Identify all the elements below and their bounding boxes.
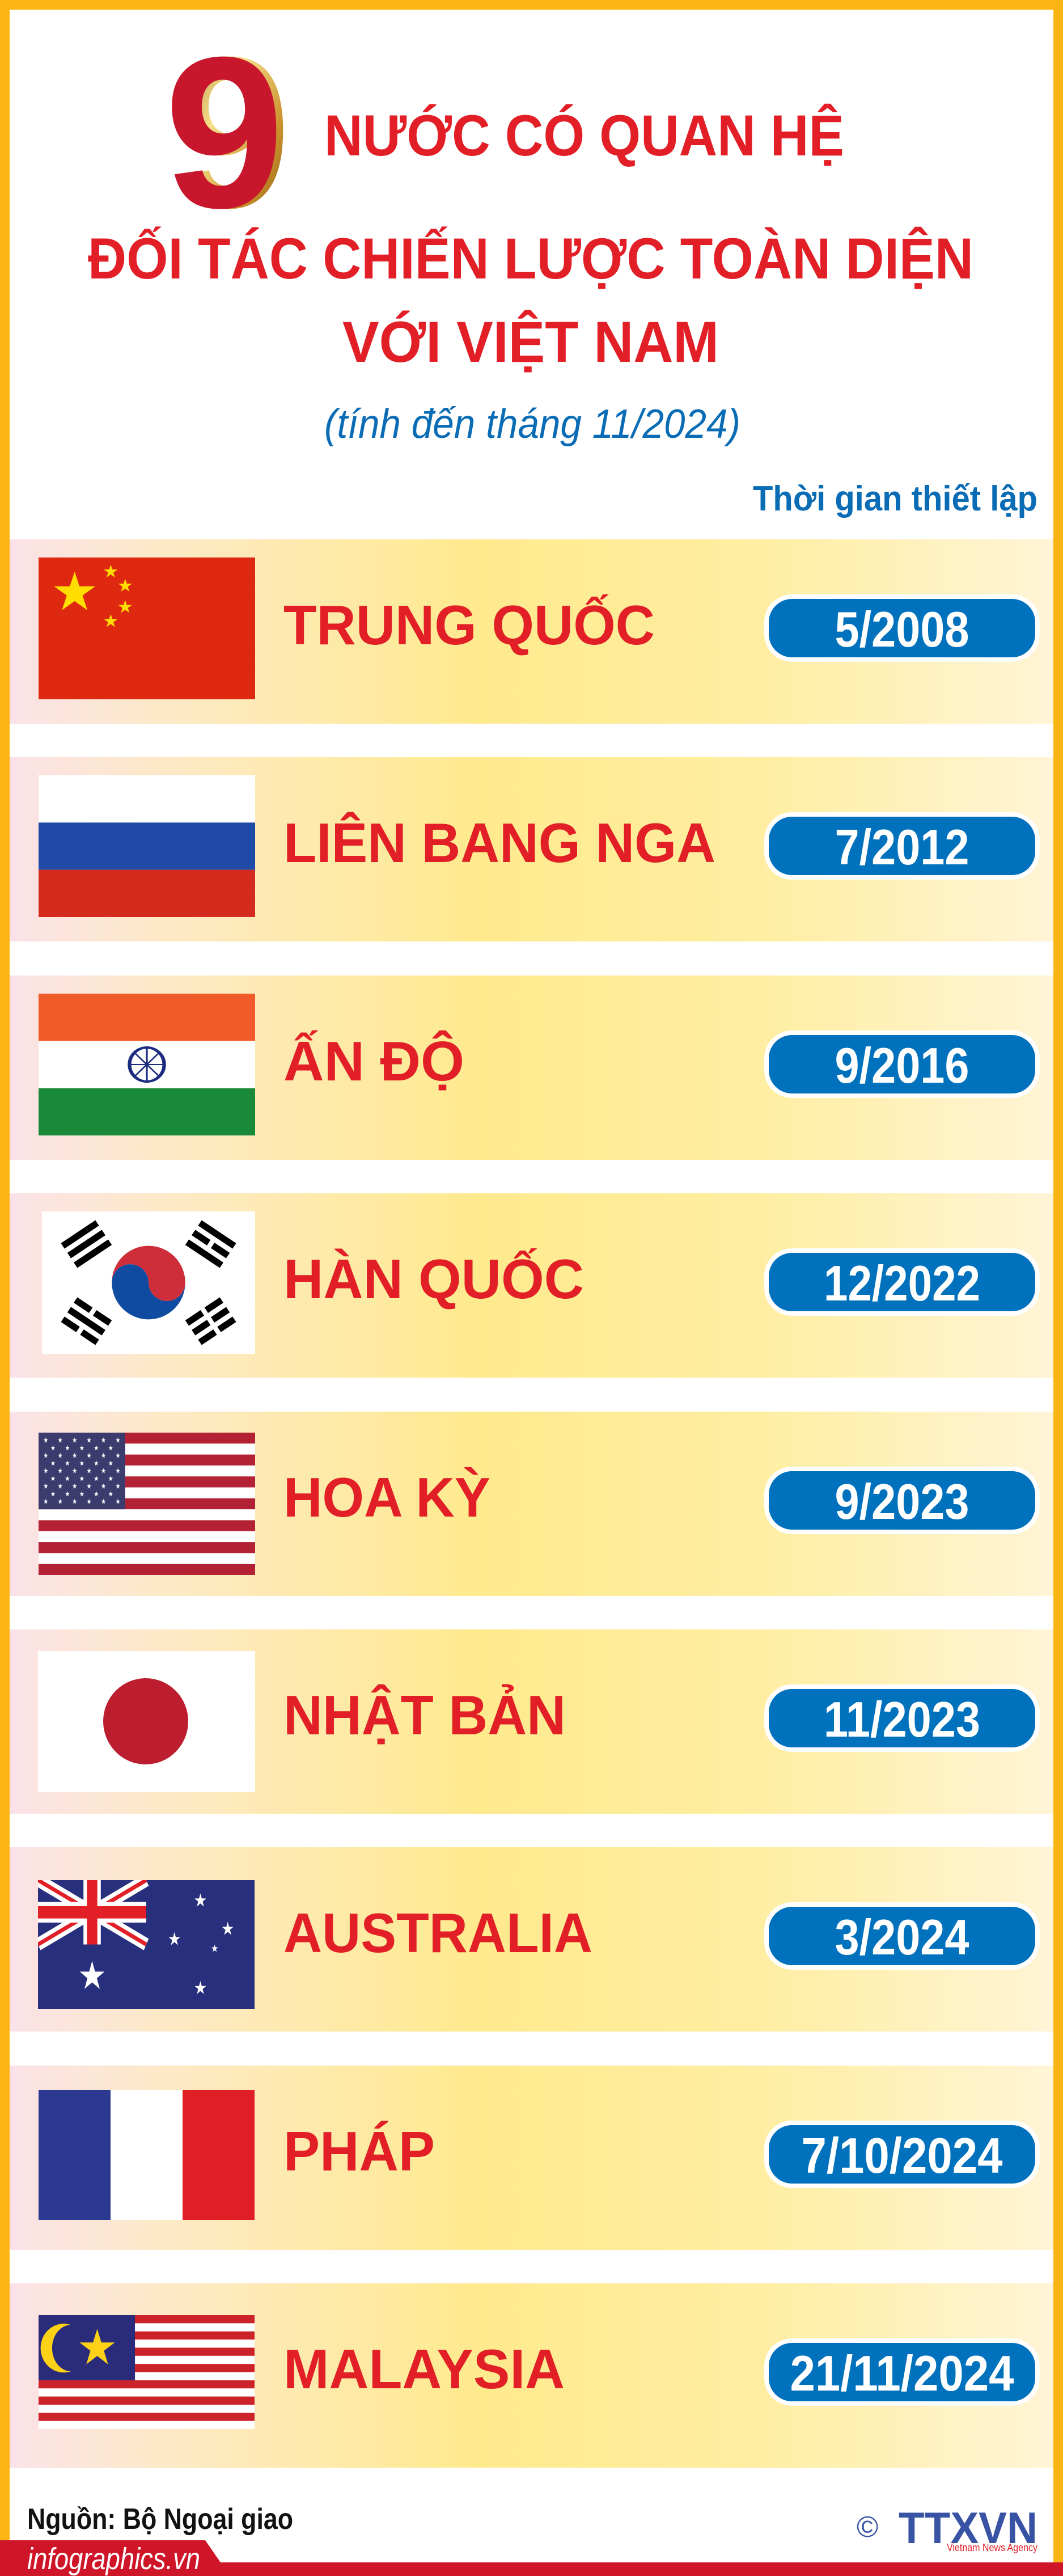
date pill: 3/2024	[835, 1909, 969, 1965]
date pill	[766, 814, 1037, 877]
row: Korea	[10, 1193, 1053, 1378]
row: Russia	[10, 757, 1053, 941]
date pill: 7/2012	[835, 819, 969, 875]
row: Japan	[10, 1629, 1053, 1814]
date pill: 12/2022	[824, 1255, 980, 1311]
country name: TRUNG QUỐC	[283, 594, 655, 656]
flag: India	[39, 994, 255, 1135]
row: USA	[10, 1412, 1053, 1596]
footer: red bar with website: infographics.vn	[27, 2542, 200, 2576]
country name: NHẬT BẢN	[283, 1684, 566, 1746]
source note: Nguồn: Bộ Ngoại giao	[27, 2503, 293, 2536]
country name: LIÊN BANG NGA	[283, 812, 715, 874]
logo: TTXVN: Vietnam News Agency	[947, 2542, 1037, 2553]
date pill: 21/11/2024	[790, 2345, 1014, 2401]
country name: MALAYSIA	[283, 2338, 565, 2400]
flag: China	[39, 558, 255, 699]
flag: South Korea	[42, 1211, 255, 1354]
row: Australia	[10, 1847, 1053, 2032]
date pill: 11/2023	[824, 1691, 980, 1747]
row: India	[10, 975, 1053, 1160]
date pill	[766, 1687, 1037, 1750]
date pill: 9/2016	[835, 1037, 969, 1093]
country name: HOA KỲ	[283, 1466, 490, 1528]
title line 1: NƯỚC CÓ QUAN HỆ	[324, 103, 844, 168]
date pill	[766, 597, 1037, 660]
flag: Malaysia	[39, 2315, 255, 2429]
title line 3: VỚI VIỆT NAM	[342, 310, 719, 374]
subtitle: (tính đến tháng 11/2024)	[324, 402, 740, 447]
column header: establishment time: Thời gian thiết lập	[753, 479, 1037, 518]
country name: PHÁP	[283, 2120, 435, 2182]
title line 2: ĐỐI TÁC CHIẾN LƯỢC TOÀN DIỆN	[88, 226, 973, 291]
flag: Australia	[38, 1880, 255, 2009]
date pill	[766, 1251, 1037, 1314]
logo: TTXVN: TTXVN	[899, 2503, 1037, 2553]
flag: Japan	[38, 1651, 255, 1792]
title: number 9: 9	[164, 12, 284, 253]
date pill	[766, 1033, 1037, 1096]
flag: Russia	[39, 775, 255, 917]
footer: red bar with website	[0, 2540, 1063, 2576]
country name: AUSTRALIA	[283, 1902, 592, 1964]
country name: HÀN QUỐC	[283, 1248, 584, 1310]
date pill: 7/10/2024	[802, 2127, 1003, 2184]
logo: TTXVN: ©	[857, 2511, 878, 2544]
date pill	[766, 1469, 1037, 1532]
flag: United States	[39, 1433, 255, 1575]
date pill	[766, 1904, 1037, 1967]
country name: ẤN ĐỘ	[283, 1030, 464, 1092]
row: Malaysia	[10, 2283, 1053, 2468]
title: number 9: 9	[171, 12, 291, 253]
date pill: 9/2023	[835, 1473, 969, 1530]
flag: France	[39, 2090, 255, 2220]
date pill: 5/2008	[835, 601, 969, 657]
row: France	[10, 2066, 1053, 2250]
row: China	[10, 539, 1053, 724]
